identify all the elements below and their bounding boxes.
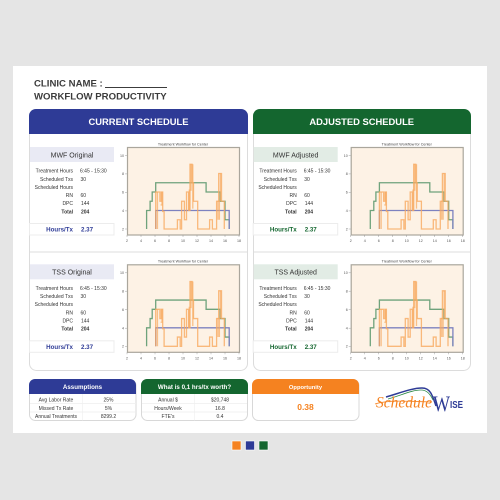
chart: TSS adjusted workflow: 10 <box>405 356 409 360</box>
block: TSS adjusted: Hours/Tx <box>270 344 297 351</box>
logo: ScheduleWise <box>375 388 463 416</box>
chart: MWF original workflow: 16 <box>223 239 227 243</box>
chart: TSS original workflow: 10 <box>120 271 124 275</box>
panel: what is 0,1 hrs/tx worth: 0.4 <box>217 414 224 420</box>
chart: TSS original workflow: 18 <box>237 356 241 360</box>
chart: TSS adjusted workflow: 8 <box>392 356 394 360</box>
panel: what is 0,1 hrs/tx worth: FTE's <box>162 414 175 420</box>
panel: opportunity: 0.38 <box>297 402 314 412</box>
block: TSS original: 30 <box>80 294 86 300</box>
chart: MWF original workflow: 18 <box>237 239 241 243</box>
chart: TSS original workflow: 2 <box>122 345 124 349</box>
chart: TSS adjusted workflow: Treatment Workflow for Center <box>382 260 433 264</box>
block: MWF original: 204 <box>81 209 90 215</box>
chart: TSS adjusted workflow: 8 <box>346 290 348 294</box>
chart: MWF adjusted workflow: 2 <box>346 227 348 231</box>
title: WORKFLOW PRODUCTIVITY <box>34 92 167 102</box>
chart: MWF original workflow: 2 <box>126 239 128 243</box>
block: MWF adjusted: Scheduled Hours <box>258 185 297 191</box>
block: MWF original: Hours/Tx <box>46 226 74 234</box>
block: MWF adjusted: Total <box>285 209 297 215</box>
title: CLINIC NAME : <box>34 78 103 90</box>
block: MWF adjusted <box>253 147 338 235</box>
block: TSS adjusted: 204 <box>305 327 313 333</box>
chart: TSS adjusted workflow: 2 <box>350 356 352 360</box>
block: MWF adjusted: 6:45 - 15:30 <box>304 169 331 175</box>
chart: TSS original workflow: 16 <box>223 356 227 360</box>
block: MWF original: 60 <box>80 193 86 199</box>
block: TSS adjusted: DPC <box>286 318 297 324</box>
block: MWF original: 30 <box>80 177 86 183</box>
block: MWF adjusted: RN <box>289 193 297 199</box>
block: TSS original: 60 <box>80 310 86 316</box>
block: TSS original: TSS Original <box>52 270 92 277</box>
block: TSS adjusted: Scheduled Txs <box>264 294 297 300</box>
block: MWF adjusted: 2.37 <box>305 226 317 234</box>
panel: opportunity <box>252 379 359 420</box>
block: MWF adjusted: DPC <box>286 201 297 207</box>
chart: TSS adjusted workflow: 14 <box>433 356 437 360</box>
colour swatches <box>232 441 268 450</box>
chart: MWF original workflow: 10 <box>181 239 185 243</box>
panel: current schedule <box>29 109 248 370</box>
chart: MWF original workflow <box>120 142 241 243</box>
title <box>34 78 167 102</box>
panel: assumptions: 5% <box>105 406 113 412</box>
chart: TSS adjusted workflow: 16 <box>447 356 451 360</box>
chart: TSS original workflow: 2 <box>126 356 128 360</box>
panel: assumptions: Assumptions <box>63 384 103 391</box>
block: TSS original: 204 <box>81 327 90 333</box>
chart: TSS adjusted workflow: 12 <box>419 356 423 360</box>
chart: MWF adjusted workflow: 10 <box>344 154 348 158</box>
block: TSS adjusted: TSS Adjusted <box>274 270 317 277</box>
block: TSS adjusted <box>253 264 338 352</box>
block: MWF original: DPC <box>62 201 73 207</box>
chart: MWF adjusted workflow: 4 <box>346 209 348 213</box>
chart: TSS original workflow: 4 <box>140 356 142 360</box>
block: TSS original: 6:45 - 15:30 <box>80 286 107 292</box>
chart: MWF original workflow: 6 <box>122 191 124 195</box>
panel: assumptions: Annual Treatments <box>35 414 77 420</box>
chart: TSS original workflow: 10 <box>181 356 185 360</box>
adjusted schedule header: ADJUSTED SCHEDULE <box>309 116 414 127</box>
block: TSS original: 144 <box>81 318 90 324</box>
chart: MWF adjusted workflow: 10 <box>405 239 409 243</box>
chart: MWF adjusted workflow: 14 <box>433 239 437 243</box>
chart: TSS original workflow: 8 <box>122 290 124 294</box>
chart: TSS adjusted workflow <box>344 260 465 360</box>
chart: MWF adjusted workflow: 18 <box>461 239 465 243</box>
block: MWF adjusted: 144 <box>305 201 313 207</box>
chart: MWF original workflow: 2 <box>122 227 124 231</box>
block: TSS original: DPC <box>62 318 73 324</box>
panel: opportunity: Opportunity <box>289 385 323 391</box>
chart: TSS original workflow: 6 <box>122 308 124 312</box>
panel: assumptions: 25% <box>103 398 114 404</box>
block: TSS original <box>30 264 114 352</box>
block: MWF original: Scheduled Hours <box>35 185 73 191</box>
chart: TSS adjusted workflow: 4 <box>364 356 366 360</box>
chart: MWF original workflow: 12 <box>195 239 199 243</box>
chart: MWF adjusted workflow: 6 <box>346 191 348 195</box>
chart: MWF adjusted workflow: 4 <box>364 239 366 243</box>
chart: MWF adjusted workflow: Treatment Workflow for Center <box>382 142 433 146</box>
chart: MWF original workflow: 14 <box>209 239 213 243</box>
adjusted schedule header <box>253 109 471 134</box>
block: TSS adjusted: 6:45 - 15:30 <box>304 286 331 292</box>
block: TSS original: Scheduled Txs <box>40 294 73 300</box>
panel: assumptions: Missed Tx Rate <box>39 406 74 412</box>
block: MWF adjusted: 204 <box>305 209 313 215</box>
current schedule header: CURRENT SCHEDULE <box>88 116 189 127</box>
block: TSS original: Total <box>61 327 74 333</box>
panel: assumptions <box>29 379 136 420</box>
block: TSS original: Treatment Hours <box>36 286 73 292</box>
chart: TSS original workflow: 4 <box>122 326 124 330</box>
block: MWF original: 144 <box>81 201 90 207</box>
chart: TSS adjusted workflow: 6 <box>346 308 348 312</box>
chart: MWF adjusted workflow <box>344 142 465 243</box>
block: TSS adjusted: Total <box>285 327 297 333</box>
block: MWF original: RN <box>66 193 73 199</box>
chart: MWF original workflow: 4 <box>122 209 124 213</box>
block: MWF adjusted: 60 <box>304 193 310 199</box>
chart: MWF original workflow: 8 <box>122 172 124 176</box>
chart: TSS original workflow <box>120 260 241 360</box>
chart: MWF original workflow: 6 <box>154 239 156 243</box>
chart: TSS original workflow: Treatment Workflow for Center <box>158 260 209 264</box>
chart: TSS adjusted workflow: 6 <box>378 356 380 360</box>
block: MWF original <box>30 147 114 235</box>
chart: MWF adjusted workflow: 16 <box>447 239 451 243</box>
chart: TSS original workflow: 6 <box>154 356 156 360</box>
block: TSS original: Scheduled Hours <box>35 302 73 308</box>
logo: ScheduleWise: ISE <box>450 400 463 411</box>
chart: TSS original workflow: 12 <box>195 356 199 360</box>
panel: what is 0,1 hrs/tx worth: Hours/Week <box>154 406 182 412</box>
block: MWF adjusted: 30 <box>304 177 310 183</box>
chart: MWF adjusted workflow: 8 <box>392 239 394 243</box>
chart: TSS adjusted workflow: 18 <box>461 356 465 360</box>
block: TSS adjusted: 60 <box>304 310 310 316</box>
block: TSS adjusted: RN <box>289 310 297 316</box>
panel: what is 0,1 hrs/tx worth: What is 0,1 hrs/tx worth? <box>158 384 231 391</box>
chart: TSS original workflow: 8 <box>168 356 170 360</box>
block: MWF adjusted: Hours/Tx <box>270 226 297 234</box>
block: MWF adjusted: Scheduled Txs <box>264 177 297 183</box>
logo: ScheduleWise: Schedule <box>376 394 432 412</box>
block: TSS adjusted: Treatment Hours <box>259 286 297 292</box>
logo: ScheduleWise: W <box>433 391 450 416</box>
block: MWF original: Treatment Hours <box>36 169 73 175</box>
panel: assumptions: 8299.2 <box>101 414 116 420</box>
panel: what is 0,1 hrs/tx worth: $20,748 <box>211 398 229 404</box>
block: MWF adjusted: Treatment Hours <box>259 169 297 175</box>
block: TSS original: RN <box>66 310 73 316</box>
block: TSS adjusted: 30 <box>304 294 310 300</box>
block: TSS adjusted: 144 <box>305 318 313 324</box>
chart: MWF original workflow: 10 <box>120 154 124 158</box>
chart: TSS adjusted workflow: 10 <box>344 271 348 275</box>
block: MWF original: Scheduled Txs <box>40 177 73 183</box>
panel: adjusted schedule <box>253 109 471 370</box>
chart: MWF original workflow: Treatment Workflow for Center <box>158 142 209 146</box>
current schedule header <box>29 109 248 134</box>
block: TSS original: 2.37 <box>81 344 94 351</box>
panel: what is 0,1 hrs/tx worth: 16.8 <box>215 406 225 412</box>
block: MWF adjusted: MWF Adjusted <box>273 152 319 159</box>
panel: what is 0,1 hrs/tx worth <box>141 379 248 420</box>
chart: TSS adjusted workflow: 4 <box>346 326 348 330</box>
chart: TSS original workflow: 14 <box>209 356 213 360</box>
block: TSS adjusted: 2.37 <box>305 344 317 351</box>
chart: MWF adjusted workflow: 6 <box>378 239 380 243</box>
chart: TSS adjusted workflow: 2 <box>346 345 348 349</box>
white sheet <box>13 66 487 433</box>
chart: MWF adjusted workflow: 12 <box>419 239 423 243</box>
block: MWF original: 2.37 <box>81 226 94 234</box>
panel: assumptions: Avg Labor Rate <box>39 398 74 404</box>
chart: MWF adjusted workflow: 2 <box>350 239 352 243</box>
chart: MWF original workflow: 4 <box>140 239 142 243</box>
block: MWF original: Total <box>61 209 74 215</box>
block: MWF original: 6:45 - 15:30 <box>80 169 107 175</box>
block: TSS adjusted: Scheduled Hours <box>258 302 297 308</box>
chart: MWF adjusted workflow: 8 <box>346 172 348 176</box>
block: MWF original: MWF Original <box>51 152 94 159</box>
chart: MWF original workflow: 8 <box>168 239 170 243</box>
panel: what is 0,1 hrs/tx worth: Annual $ <box>158 398 178 404</box>
block: TSS original: Hours/Tx <box>46 344 74 351</box>
